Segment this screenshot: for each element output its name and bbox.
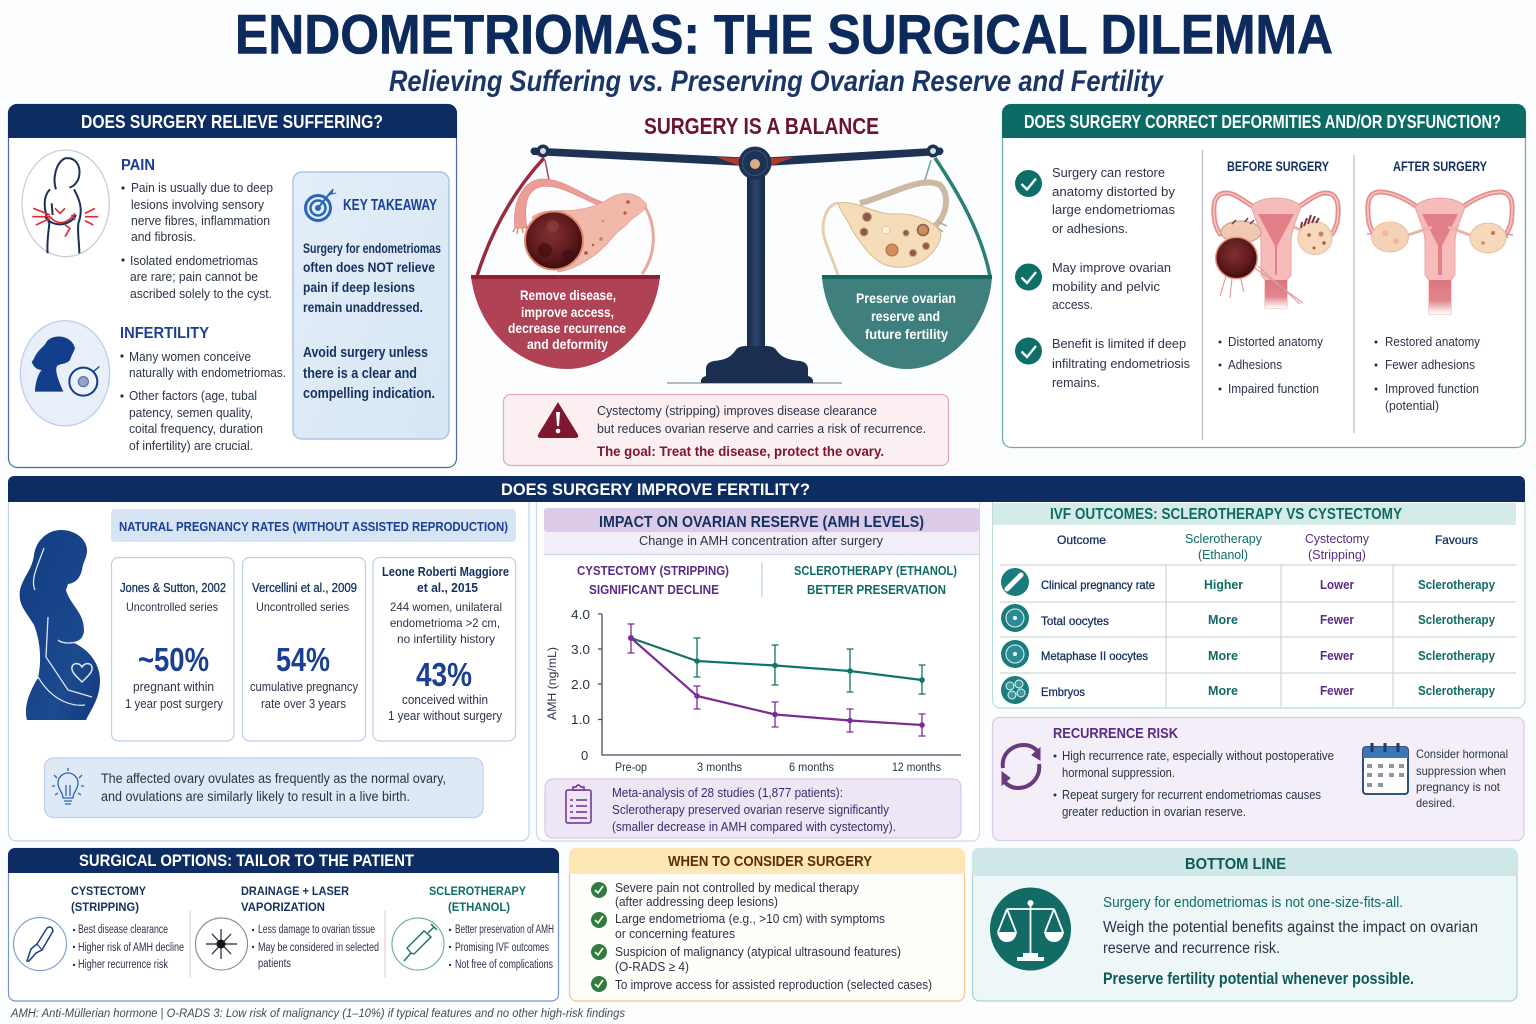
card: Jones and Sutton: 1 year post surgery [125,696,223,711]
heading: after surgery: AFTER SURGERY [1393,158,1488,174]
text: bottom line message: Preserve fertility potential whenever possible. [1103,970,1414,988]
icon: laser burst [196,918,248,970]
banner: natural pregnancy rates: NATURAL PREGNANCY RATES (WITHOUT ASSISTED REPRODUCTION) [119,519,508,534]
table row: clinical pregnancy rate [1001,568,1496,596]
illustration: right pan with text: reserve and [871,308,940,324]
heading: surgery is a balance: SURGERY IS A BALANCE [644,113,879,139]
text: bottom line message: reserve and recurrence risk. [1103,940,1280,957]
table row: embryos: Sclerotherapy [1418,683,1496,698]
text: mobility: May improve ovarian [1052,260,1171,275]
panel: impact on ovarian reserve [536,502,980,841]
card: Jones and Sutton: Uncontrolled series [126,600,218,614]
table row: total oocytes [1001,604,1496,632]
chart: AMH over time [545,607,961,774]
text: pain bullets: lesions involving sensory [131,197,264,212]
callout: ovulation tip: The affected ovary ovulates as frequently as the normal ovary, [101,771,446,786]
text: pain bullets: ascribed solely to the cyst. [130,286,272,301]
panel: does surgery correct deformities [1002,104,1526,448]
callout: key takeaway [293,172,449,439]
heading: recurrence risk: RECURRENCE RISK [1053,725,1178,742]
table: column headers: Sclerotherapy [1185,531,1262,546]
callout: cystectomy warning: but reduces ovarian reserve and carries a risk of recurrence. [597,421,926,436]
text: benefit limited: Benefit is limited if deep [1052,336,1186,351]
heading: infertility: INFERTILITY [120,325,209,342]
table row: total oocytes: More [1208,612,1238,627]
option: sclerotherapy: Promising IVF outcomes [455,942,549,954]
option: sclerotherapy: Better preservation of AMH [455,924,554,936]
list item: large endometrioma: Large endometrioma (e.g., >10 cm) with symptoms [615,911,885,926]
card: Vercellini: Uncontrolled series [256,600,349,614]
card: Leone Roberti Maggiore: 1 year without surgery [388,708,502,723]
heading band: does surgery improve fertility [8,476,1525,502]
heading band: does surgery improve fertility: DOES SURGERY IMPROVE FERTILITY? [501,480,810,499]
table row: metaphase II oocytes: More [1208,648,1238,663]
table row: embryos: More [1208,683,1238,698]
icon: check 2 [1015,264,1042,290]
chart: AMH over time: 12 months [892,762,941,774]
text: pain bullets: are rare; pain cannot be [130,269,258,284]
card: Vercellini: Vercellini et al., 2009 [252,580,357,595]
text: mobility [1052,260,1171,312]
table row: embryos [1001,676,1496,704]
illustration: healthy ovary [823,183,947,275]
icon: check 3 [1015,338,1042,364]
illustration: left pan with text: and deformity [527,336,608,352]
card: Jones and Sutton: pregnant within [133,679,214,694]
icon: justice scale [990,888,1071,970]
callout: key takeaway: often does NOT relieve [303,260,435,275]
text: before surgery bullets: Adhesions [1228,357,1282,372]
table row: clinical pregnancy rate: Higher [1204,577,1243,592]
option: sclerotherapy [392,884,554,971]
card: Leone Roberti Maggiore: 43% [416,656,472,693]
table: column headers: (Ethanol) [1198,547,1248,562]
card: Leone Roberti Maggiore: et al., 2015 [417,581,478,595]
option: drainage and laser: DRAINAGE + LASER [241,884,349,898]
chart: AMH over time: Pre-op [615,762,647,774]
table: column headers: Outcome [1057,533,1106,547]
text: bottom line message: Surgery for endometriomas is not one-size-fits-all. [1103,895,1403,911]
option: drainage and laser [196,884,379,970]
option: cystectomy: Best disease clearance [78,924,168,936]
illustration: right pan with text: Preserve ovarian [856,290,956,306]
callout: cystectomy warning [504,394,948,466]
text: benefit limited: remains. [1052,375,1100,390]
callout: key takeaway: there is a clear and [303,366,417,382]
table row: metaphase II oocytes: Sclerotherapy [1418,648,1496,663]
panel: recurrence risk [992,718,1524,840]
table row: embryos: Embryos [1041,685,1085,699]
card: Leone Roberti Maggiore: conceived within [402,692,488,707]
text: restore anatomy: large endometriomas [1052,202,1175,217]
heading: IVF outcomes: IVF OUTCOMES: SCLEROTHERAPY VS CYSTECTOMY [1050,506,1403,523]
text: pain bullets [121,180,273,301]
series: cystectomy [628,624,926,736]
illustration: right pan with text: future fertility [865,326,948,342]
callout: key takeaway: compelling indication. [303,386,435,402]
table row: clinical pregnancy rate: Lower [1320,577,1354,592]
icon: calendar [1363,743,1408,794]
option: cystectomy: Higher risk of AMH decline [78,942,184,954]
option: cystectomy: (STRIPPING) [71,900,139,914]
card: Leone Roberti Maggiore: endometrioma >2 cm, [390,616,500,630]
label: cystectomy decline: SIGNIFICANT DECLINE [589,582,719,597]
callout: cystectomy warning: Cystectomy (stripping) improves disease clearance [597,403,877,418]
text: restore anatomy: anatomy distorted by [1052,184,1175,199]
heading: bottom line: BOTTOM LINE [1185,856,1286,873]
text: pain bullets: Isolated endometriomas [130,253,258,268]
card: Jones and Sutton: Jones & Sutton, 2002 [120,580,226,595]
label: sclerotherapy preservation: BETTER PRESERVATION [807,582,946,597]
illustration: right pan with text [822,276,992,369]
list item: suspicion of malignancy: Suspicion of malignancy (atypical ultrasound features) [615,944,901,959]
card: Vercellini: rate over 3 years [261,696,346,711]
table: column headers: (Stripping) [1308,547,1366,562]
text: after surgery bullets: Restored anatomy [1385,334,1480,349]
table row: metaphase II oocytes [1001,640,1496,668]
text: after surgery bullets: (potential) [1385,398,1439,413]
icon: woman with pelvic pain [22,150,109,257]
text: restore anatomy: or adhesions. [1052,221,1128,236]
text: after surgery bullets [1374,334,1480,413]
text: before surgery bullets [1218,334,1323,396]
text: recurrence bullets [1054,748,1334,819]
callout: ovulation tip: and ovulations are similarly likely to result in a live birth. [101,789,410,804]
option: drainage and laser: VAPORIZATION [241,900,325,914]
label: sclerotherapy preservation [794,563,957,597]
table row: total oocytes: Total oocytes [1041,614,1109,628]
text: recurrence bullets: Repeat surgery for recurrent endometriomas causes [1062,787,1321,802]
list item: severe pain: Severe pain not controlled by medical therapy [615,880,859,895]
table row: total oocytes: Sclerotherapy [1418,612,1496,627]
label: cystectomy decline [577,563,729,597]
callout: key takeaway: Avoid surgery unless [303,345,428,361]
list item: large endometrioma: or concerning features [615,926,735,941]
chart: AMH over time: 1.0 [571,712,590,727]
table: column headers: Favours [1435,533,1478,547]
text: restore anatomy: Surgery can restore [1052,165,1165,180]
card: Leone Roberti Maggiore: no infertility history [397,632,495,646]
subtitle: Relieving Suffering vs. Preserving Ovarian Reserve and Fertility [389,65,1164,98]
panel: natural pregnancy rates [8,502,529,841]
icon: light bulb [52,768,84,804]
list item: severe pain [591,880,859,909]
callout: ovulation tip [44,758,483,818]
option: cystectomy: Higher recurrence risk [78,959,168,971]
chart: AMH over time: 3.0 [571,642,590,657]
text: infertility bullets: coital frequency, duration [129,421,263,436]
panel: does surgery relieve suffering [8,104,457,468]
table row: total oocytes: Fewer [1320,612,1354,627]
table row: clinical pregnancy rate: Sclerotherapy [1418,577,1496,592]
callout: key takeaway: remain unaddressed. [303,300,423,315]
heading: pain: PAIN [121,157,155,174]
illustration: pregnant silhouette [20,530,100,720]
text: hormonal suppression note: desired. [1416,796,1455,810]
heading: when to consider surgery: WHEN TO CONSIDER SURGERY [668,853,872,870]
icon: infertility woman with target [20,321,110,426]
panel: IVF outcomes table [992,502,1525,708]
list item: suspicion of malignancy: (O-RADS ≥ 4) [615,959,689,974]
text: benefit limited [1052,336,1190,390]
text: infertility bullets: Many women conceive [129,349,251,364]
callout: meta-analysis: (smaller decrease in AMH compared with cystectomy). [612,819,896,834]
illustration: left pan with text: decrease recurrence [508,320,626,336]
list item: assisted reproduction access: To improve access for assisted reproduction (selected cases) [615,977,932,992]
text: chart subtitle: Change in AMH concentration after surgery [639,533,883,548]
callout: key takeaway: KEY TAKEAWAY [343,197,437,214]
illustration: left pan with text [471,276,660,369]
text: hormonal suppression note: pregnancy is not [1416,780,1501,794]
text: benefit limited: infiltrating endometriosis [1052,356,1190,371]
illustration: uterus before surgery [1214,193,1338,308]
card: Jones and Sutton: ~50% [138,641,209,678]
option: drainage and laser: patients [258,958,291,970]
text: before surgery bullets: Impaired function [1228,381,1319,396]
icon: clipboard [566,785,591,823]
footnote: AMH: Anti-Müllerian hormone | O-RADS 3: Low risk of malignancy (1–10%) if typical features and no other high-risk findings [10,1008,625,1020]
heading: surgical options: SURGICAL OPTIONS: TAILOR TO THE PATIENT [79,852,414,870]
illustration: left pan with text: improve access, [521,304,614,320]
text: hormonal suppression note: Consider hormonal [1416,747,1508,761]
icon: scalpel [14,918,66,970]
text: infertility bullets: patency, semen quality, [129,405,253,420]
callout: meta-analysis: Sclerotherapy preserved ovarian reserve significantly [612,802,889,817]
icon: check 1 [1015,170,1042,197]
panel: when to consider surgery [569,848,965,1001]
option: drainage and laser: May be considered in selected [258,942,379,954]
text: infertility bullets: naturally with endometriomas. [129,365,286,380]
illustration: left pan with text: Remove disease, [520,287,616,303]
title: ENDOMETRIOMAS: THE SURGICAL DILEMMA [235,4,1333,66]
panel: surgical options [8,848,559,1001]
text: infertility bullets [120,349,286,453]
text: mobility: access. [1052,297,1093,312]
card: Vercellini [242,558,366,741]
text: pain bullets: Pain is usually due to deep [131,180,273,195]
callout: key takeaway: Surgery for endometriomas [303,241,441,256]
heading: AMH impact: IMPACT ON OVARIAN RESERVE (AMH LEVELS) [599,514,924,531]
table row: metaphase II oocytes: Fewer [1320,648,1354,663]
illustration: ovary with endometrioma [513,179,653,274]
text: recurrence bullets: High recurrence rate, especially without postoperative [1062,748,1334,763]
label: cystectomy decline: CYSTECTOMY (STRIPPING) [577,563,729,578]
callout: meta-analysis [545,779,961,838]
text: recurrence bullets: hormonal suppression. [1062,765,1175,780]
text: pain bullets: nerve fibres, inflammation [131,213,270,228]
option: sclerotherapy: Not free of complications [455,959,553,971]
panel: bottom line [972,848,1517,1001]
table row: metaphase II oocytes: Metaphase II oocytes [1041,649,1148,663]
icon: warning triangle [539,404,577,437]
callout: meta-analysis: Meta-analysis of 28 studies (1,877 patients): [612,785,843,800]
text: mobility: mobility and pelvic [1052,279,1161,294]
card: Vercellini: 54% [276,641,330,678]
text: bottom line message: Weigh the potential benefits against the impact on ovarian [1103,919,1478,936]
card: Jones and Sutton [112,558,234,741]
text: bottom line message [1103,895,1478,988]
text: recurrence bullets: greater reduction in ovarian reserve. [1062,804,1246,819]
text: before surgery bullets: Distorted anatomy [1228,334,1323,349]
table: column headers [1057,531,1478,562]
series: sclerotherapy [631,638,926,694]
list item: severe pain: (after addressing deep lesions) [615,894,778,909]
label: sclerotherapy preservation: SCLEROTHERAPY (ETHANOL) [794,563,957,578]
illustration: balance scale [477,144,990,383]
text: hormonal suppression note: suppression when [1416,764,1506,778]
list item: large endometrioma [591,911,885,941]
banner: natural pregnancy rates [111,509,516,542]
table row: clinical pregnancy rate: Clinical pregnancy rate [1041,578,1155,592]
option: drainage and laser: Less damage to ovarian tissue [258,924,375,936]
callout: cystectomy warning: The goal: Treat the disease, protect the ovary. [597,443,884,459]
chart: AMH over time: AMH (ng/mL) [545,647,559,720]
option: cystectomy [14,884,184,971]
chart: AMH over time: 2.0 [571,677,590,692]
option: sclerotherapy: (ETHANOL) [448,900,510,914]
table row: embryos: Fewer [1320,683,1354,698]
table: column headers: Cystectomy [1305,531,1369,546]
text: infertility bullets: Other factors (age, tubal [129,388,257,403]
chart: AMH over time: 0 [581,748,588,763]
card: Leone Roberti Maggiore: Leone Roberti Maggiore [382,565,509,579]
option: sclerotherapy: SCLEROTHERAPY [429,884,526,898]
chart: AMH over time: 4.0 [571,607,590,622]
card: Leone Roberti Maggiore [373,558,516,741]
text: after surgery bullets: Improved function [1385,381,1479,396]
callout: key takeaway: pain if deep lesions [303,280,415,295]
text: infertility bullets: of infertility) are crucial. [129,438,253,453]
icon: target [306,189,336,220]
option: cystectomy: CYSTECTOMY [71,884,146,898]
heading: before surgery: BEFORE SURGERY [1227,158,1330,174]
text: restore anatomy [1052,165,1175,236]
text: after surgery bullets: Fewer adhesions [1385,357,1475,372]
text: hormonal suppression note [1416,747,1508,810]
card: Vercellini: cumulative pregnancy [250,679,358,694]
chart: AMH over time: 6 months [789,762,834,774]
icon: recurrence cycle [1002,745,1040,788]
card: Leone Roberti Maggiore: 244 women, unilateral [390,600,502,614]
text: pain bullets: and fibrosis. [131,229,196,244]
heading: relieve suffering: DOES SURGERY RELIEVE SUFFERING? [81,112,383,132]
chart: AMH over time: 3 months [697,762,742,774]
illustration: uterus after surgery [1367,192,1513,314]
icon: syringe [392,918,444,970]
list item: suspicion of malignancy [591,944,901,974]
